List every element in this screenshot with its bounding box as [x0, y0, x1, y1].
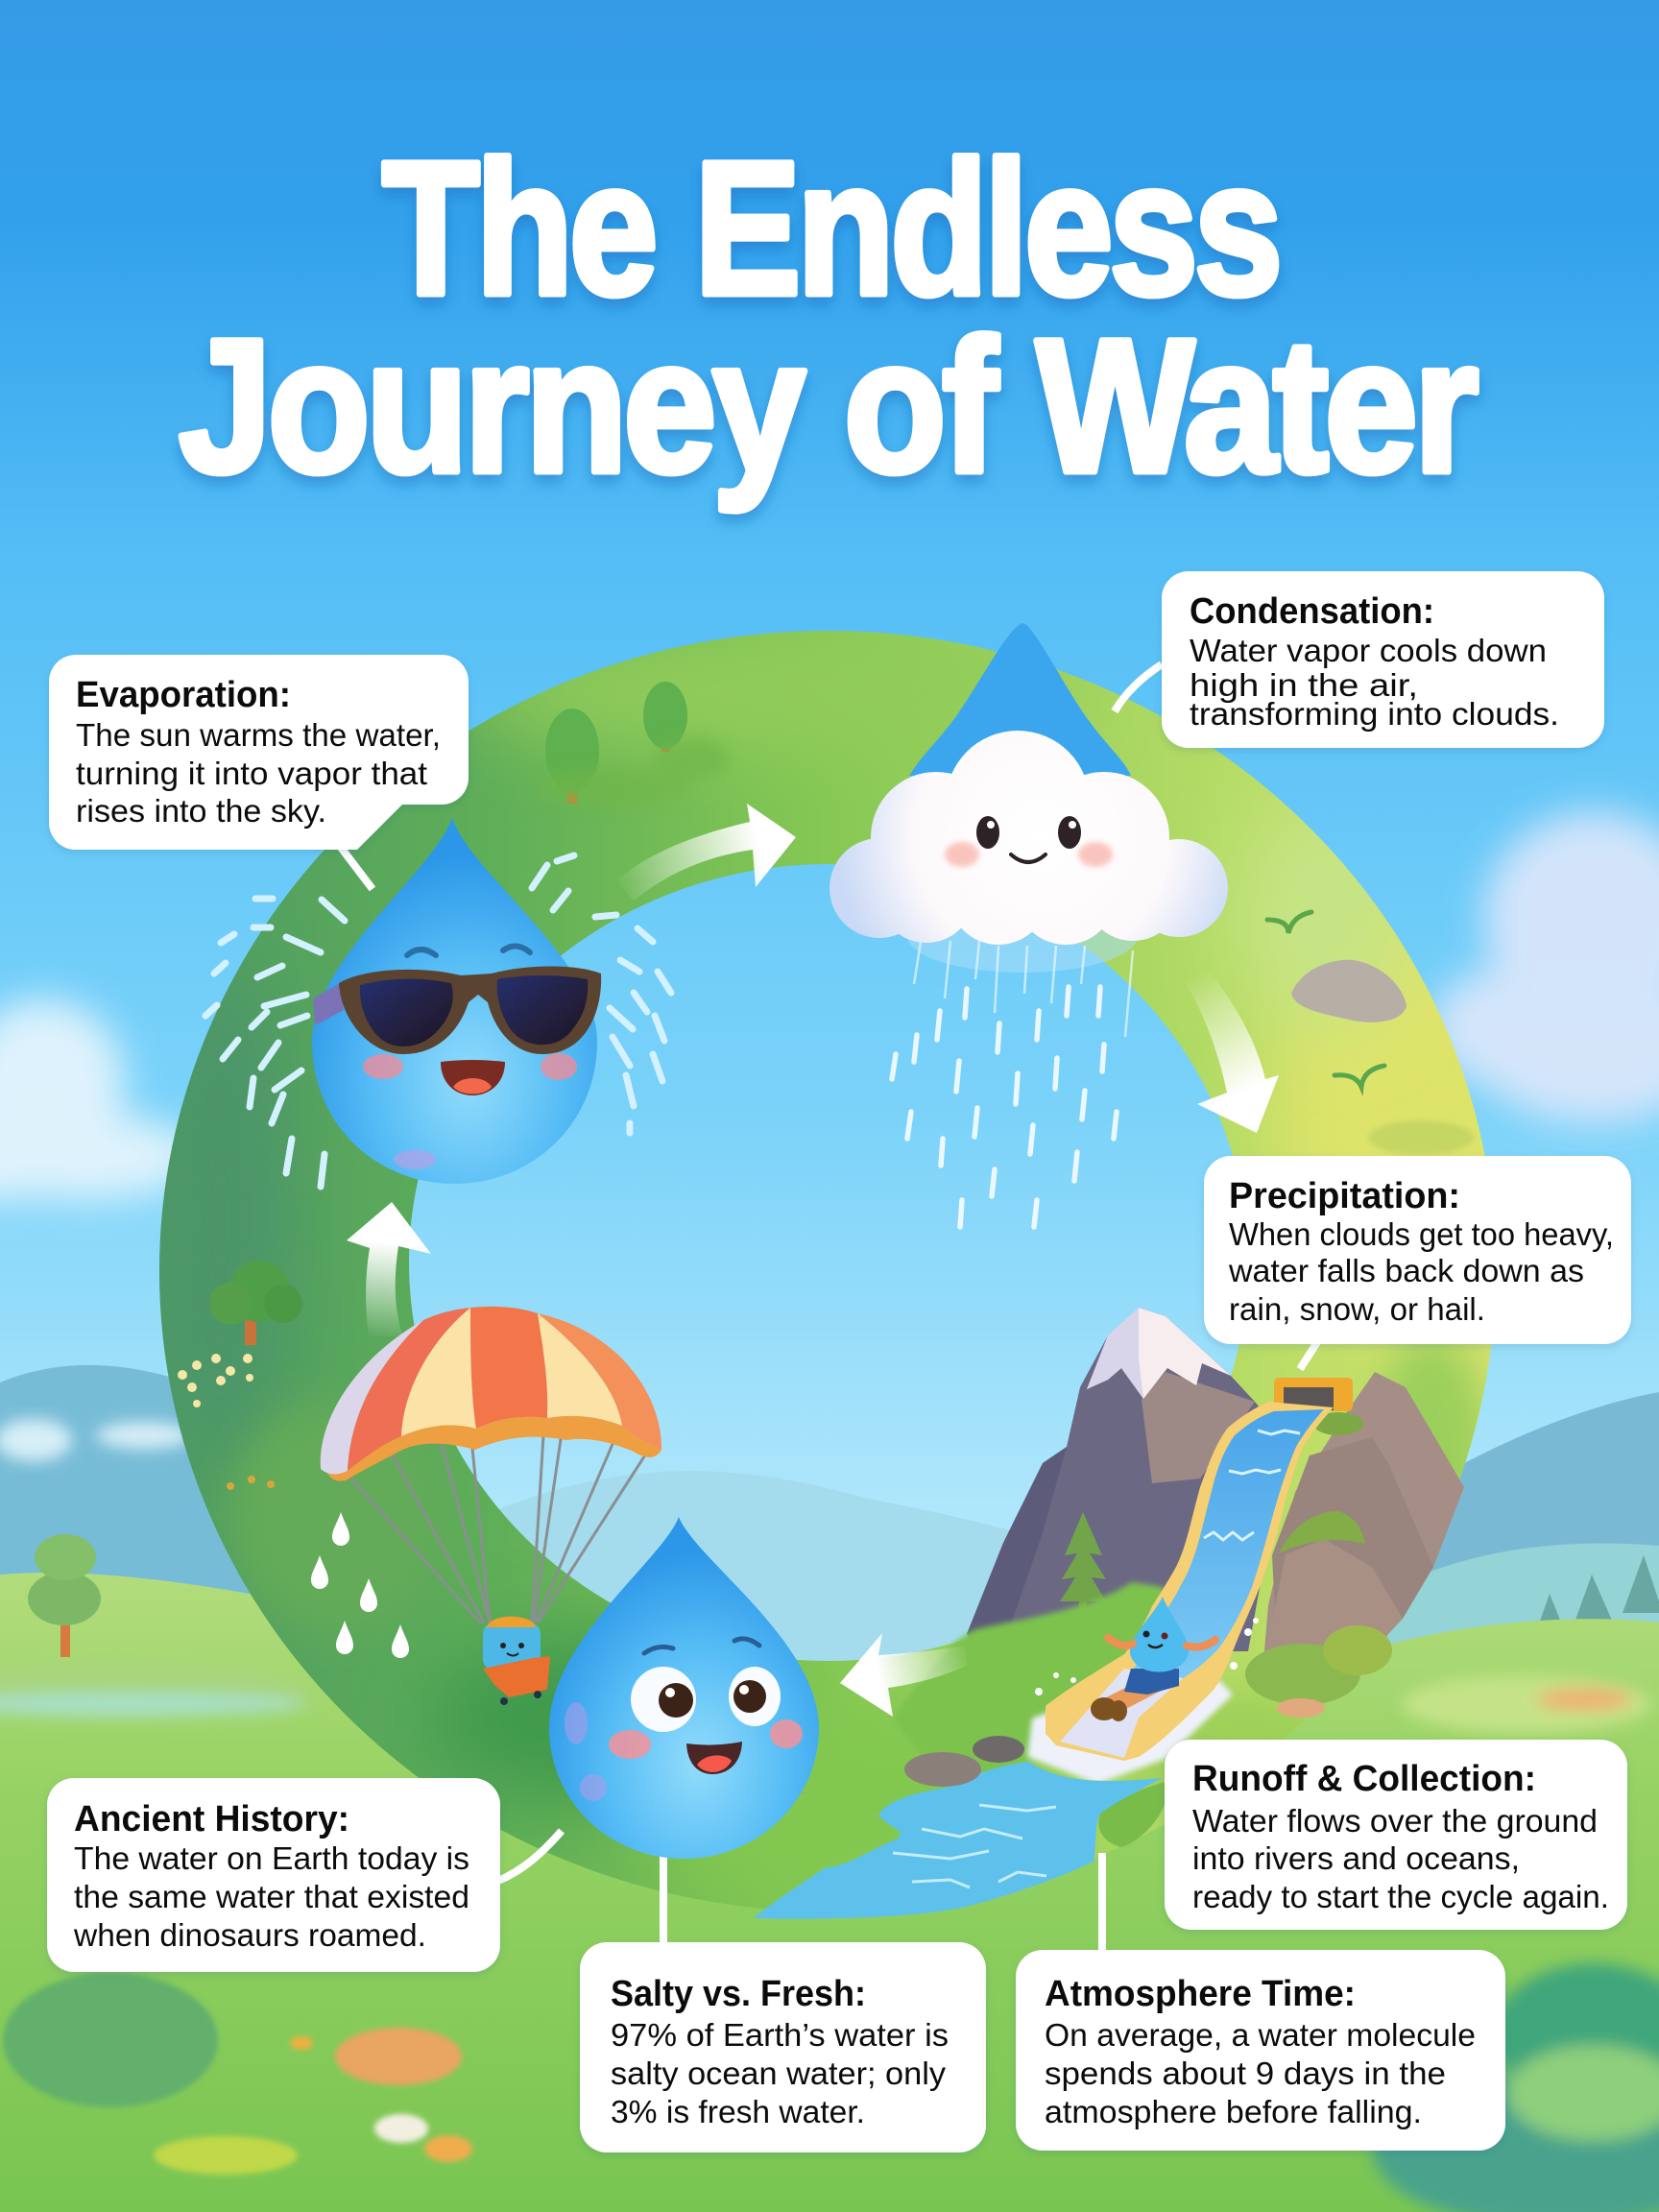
callout: runoff and collection: ready to start the cycle again. [1192, 1879, 1609, 1914]
callout: salty vs fresh: 97% of Earth’s water is [611, 2017, 949, 2053]
callout: salty vs fresh: Salty vs. Fresh: [611, 1974, 866, 2014]
callout: atmosphere time [1016, 1950, 1505, 2151]
callout: condensation: transforming into clouds. [1190, 696, 1559, 732]
arrow: evaporation to condensation [616, 804, 796, 901]
tree: left [545, 709, 599, 804]
callout: condensation [1162, 571, 1604, 748]
slide head [1274, 1378, 1353, 1411]
sunglasses [313, 966, 601, 1054]
character: big smiling drop [549, 1517, 819, 1859]
water ripples [1204, 1431, 1300, 1540]
slide rider [1091, 1597, 1215, 1721]
condensing drop [909, 623, 1131, 776]
callout: salty vs fresh: salty ocean water; only [611, 2056, 947, 2091]
callout: ancient history: when dinosaurs roamed. [73, 1917, 426, 1953]
sprouts [1267, 912, 1384, 1087]
mouth [441, 1060, 505, 1095]
little rider [483, 1617, 550, 1705]
callout: ancient history: the same water that existed [74, 1879, 469, 1914]
arrow: condensation to precipitation [1184, 972, 1279, 1133]
title [179, 122, 1478, 512]
canopy [321, 1307, 661, 1481]
river [754, 1762, 1163, 1919]
callout: runoff and collection: Water flows over the ground [1192, 1803, 1598, 1839]
callout: precipitation [1204, 1156, 1631, 1344]
background: distant hills [0, 1365, 1659, 1728]
background: clouds [0, 811, 1659, 1200]
rock [1291, 960, 1407, 1022]
mountain [967, 1308, 1286, 1651]
rider body [1130, 1597, 1189, 1672]
rocks in stream [904, 1736, 1024, 1787]
lines [349, 1420, 646, 1623]
eyebrows [644, 1639, 759, 1653]
lower slide surface [1060, 1669, 1183, 1758]
callout: atmosphere time: On average, a water molecule [1045, 2017, 1476, 2053]
rider feet [1091, 1697, 1127, 1721]
slide body [1046, 1402, 1334, 1761]
callout: runoff and collection [1165, 1740, 1627, 1930]
callout: evaporation: The sun warms the water, [76, 717, 441, 753]
callout: ancient history: The water on Earth today is [74, 1840, 469, 1876]
scenery on the ring [178, 682, 1474, 1490]
mouth [686, 1742, 742, 1774]
rider arms [1108, 1638, 1215, 1647]
river islet [1098, 1782, 1166, 1847]
callout: condensation: Water vapor cools down [1190, 633, 1547, 668]
callout: atmosphere time: Atmosphere Time: [1045, 1974, 1356, 2014]
background: meadow [0, 1534, 1659, 2212]
evaporation splashes [205, 855, 671, 1187]
cloud smile [1011, 854, 1046, 862]
rain [892, 900, 1138, 1227]
callout: atmosphere time: atmosphere before falling. [1045, 2094, 1422, 2129]
tree: right [643, 682, 687, 752]
eyebrows [407, 946, 530, 955]
flowers [178, 1354, 275, 1490]
callout: precipitation: Precipitation: [1229, 1176, 1460, 1216]
drop body [549, 1517, 819, 1859]
right flowers [1368, 1120, 1474, 1155]
rider legs [1109, 1682, 1157, 1707]
callout: precipitation: water falls back down as [1228, 1253, 1584, 1288]
arrow: parachute to evaporation [347, 1202, 431, 1336]
character: evaporating drop with sunglasses [205, 818, 671, 1187]
ring of land [154, 631, 1527, 1911]
callout: runoff and collection: Runoff & Collection: [1192, 1759, 1536, 1799]
callout: atmosphere time: spends about 9 days in the [1045, 2056, 1446, 2091]
callout: evaporation: Evaporation: [76, 675, 291, 715]
character: cloud with drop and rain [830, 623, 1228, 1227]
callout: precipitation: When clouds get too heavy, [1229, 1216, 1614, 1252]
mountain and slide scene [754, 1308, 1464, 1919]
cheeks [363, 1053, 577, 1080]
callout: condensation: high in the air, [1190, 667, 1418, 703]
callout: ancient history: Ancient History: [74, 1799, 349, 1839]
character: parachuting drop [311, 1307, 661, 1705]
eyes [631, 1667, 781, 1732]
right rocks [1263, 1372, 1464, 1662]
callout: runoff and collection: into rivers and oceans, [1192, 1840, 1520, 1876]
splash [1027, 1618, 1259, 1784]
rider shorts [1124, 1669, 1179, 1695]
title: The Endless [382, 122, 1279, 334]
pine tree [1060, 1512, 1106, 1623]
cloud body [830, 731, 1228, 945]
cheeks [609, 1719, 803, 1759]
foreground blurred blobs [3, 1963, 1659, 2212]
river ripples [893, 1805, 1056, 1887]
drop body [312, 818, 597, 1184]
callout: condensation: Condensation: [1190, 591, 1434, 632]
callout: salty vs fresh [580, 1942, 986, 2152]
bushes [1245, 1412, 1392, 1718]
arrow: runoff to ancient history [840, 1633, 967, 1717]
cloud cheeks [945, 842, 1113, 867]
bushy tree [209, 1261, 302, 1345]
callout: precipitation: rain, snow, or hail. [1229, 1291, 1485, 1327]
slide water [1133, 1409, 1324, 1678]
glints [565, 1702, 607, 1801]
callout: ancient history [47, 1778, 500, 1972]
low vegetation band [893, 1582, 1190, 1788]
callout: evaporation: turning it into vapor that [76, 756, 427, 791]
cloud eyes [976, 816, 1081, 849]
background tree [28, 1534, 101, 1657]
title: Journey of Water [179, 300, 1478, 512]
connector lines [339, 664, 1317, 1954]
callout: salty vs fresh: 3% is fresh water. [611, 2094, 865, 2129]
callout: evaporation: rises into the sky. [76, 793, 326, 829]
tummy glow [394, 1150, 436, 1169]
grass patch [538, 737, 730, 806]
callout: evaporation [49, 655, 469, 850]
rider face [1142, 1630, 1167, 1647]
falling drops [311, 1512, 409, 1658]
